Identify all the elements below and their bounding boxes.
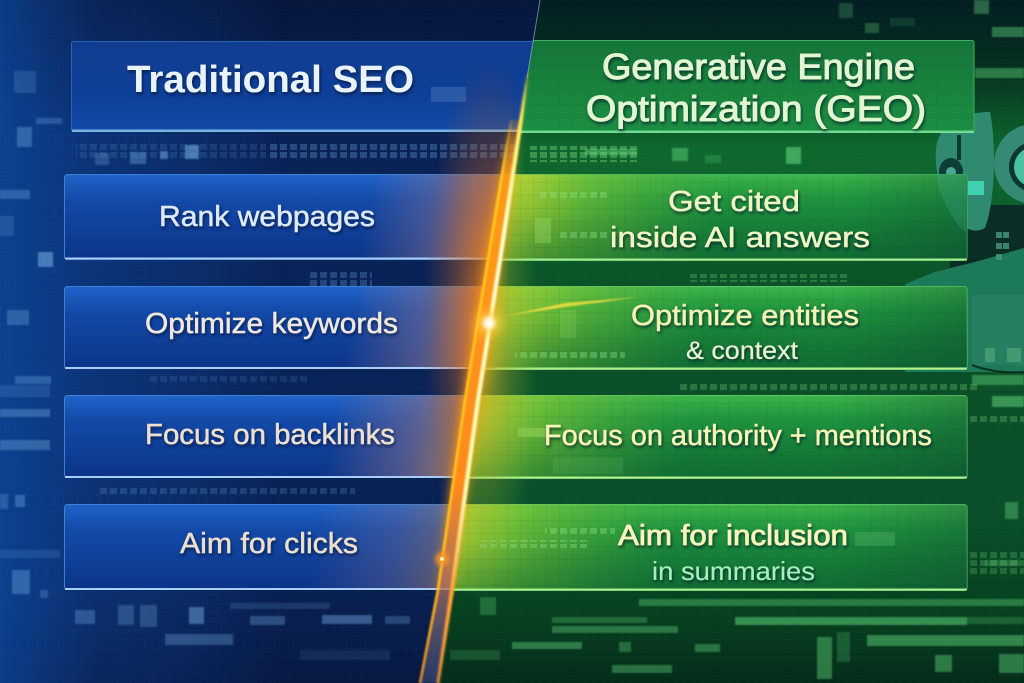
glow: warm light either side of the divider [427,74,533,504]
flare: bright spot on the beam [476,297,640,336]
panel: Generative Engine Optimization header [480,40,974,133]
row 3 left panel: Focus on backlinks [64,395,465,478]
row 3 right panel: Focus on authority + mentions [430,396,967,478]
heading: Generative Engine Optimization (GEO): Generative Engine [602,46,915,87]
row 4 right panel: Aim for inclusion in summaries: Aim for inclusion [618,520,848,552]
heading: Traditional SEO: Traditional SEO [127,59,414,101]
row 2 left panel: Optimize keywords [64,286,482,369]
row 2 right panel: Optimize entities and context [450,286,967,370]
background: blue SEO side [0,0,560,683]
row 4 right panel: Aim for inclusion in summaries [420,504,967,590]
row 1 right panel: Get cited inside AI answers: inside AI answers [610,222,870,254]
divider: diagonal golden light beam [420,0,640,683]
row 3 right panel: Focus on authority + mentions: Focus on authority + mentions [544,420,932,452]
row 1 left panel: Rank webpages [64,174,535,260]
row 2 right panel: Optimize entities and context: Optimize entities [631,300,859,332]
row 3 left panel: Focus on backlinks: Focus on backlinks [145,419,395,451]
heading: Generative Engine Optimization (GEO): Optimization (GEO) [586,88,926,129]
panel: Traditional SEO header [72,42,542,132]
row 2 left panel: Optimize keywords: Optimize keywords [145,308,398,340]
row 1 right panel: Get cited inside AI answers [470,174,967,260]
row 4 right panel: Aim for inclusion in summaries: in summaries [652,556,815,586]
flare: small spark on the beam [435,552,449,566]
row 2 right panel: Optimize entities and context: & context [686,337,798,365]
heading: Generative Engine Optimization (GEO) [586,46,926,129]
row 1 left panel: Rank webpages: Rank webpages [159,201,375,233]
icon: faint robot head on the right [905,112,1024,372]
background: green GEO side [400,0,1024,683]
row 4 left panel: Aim for clicks: Aim for clicks [180,528,358,560]
row 4 left panel: Aim for clicks [64,504,456,590]
row 1 right panel: Get cited inside AI answers: Get cited [668,186,800,218]
